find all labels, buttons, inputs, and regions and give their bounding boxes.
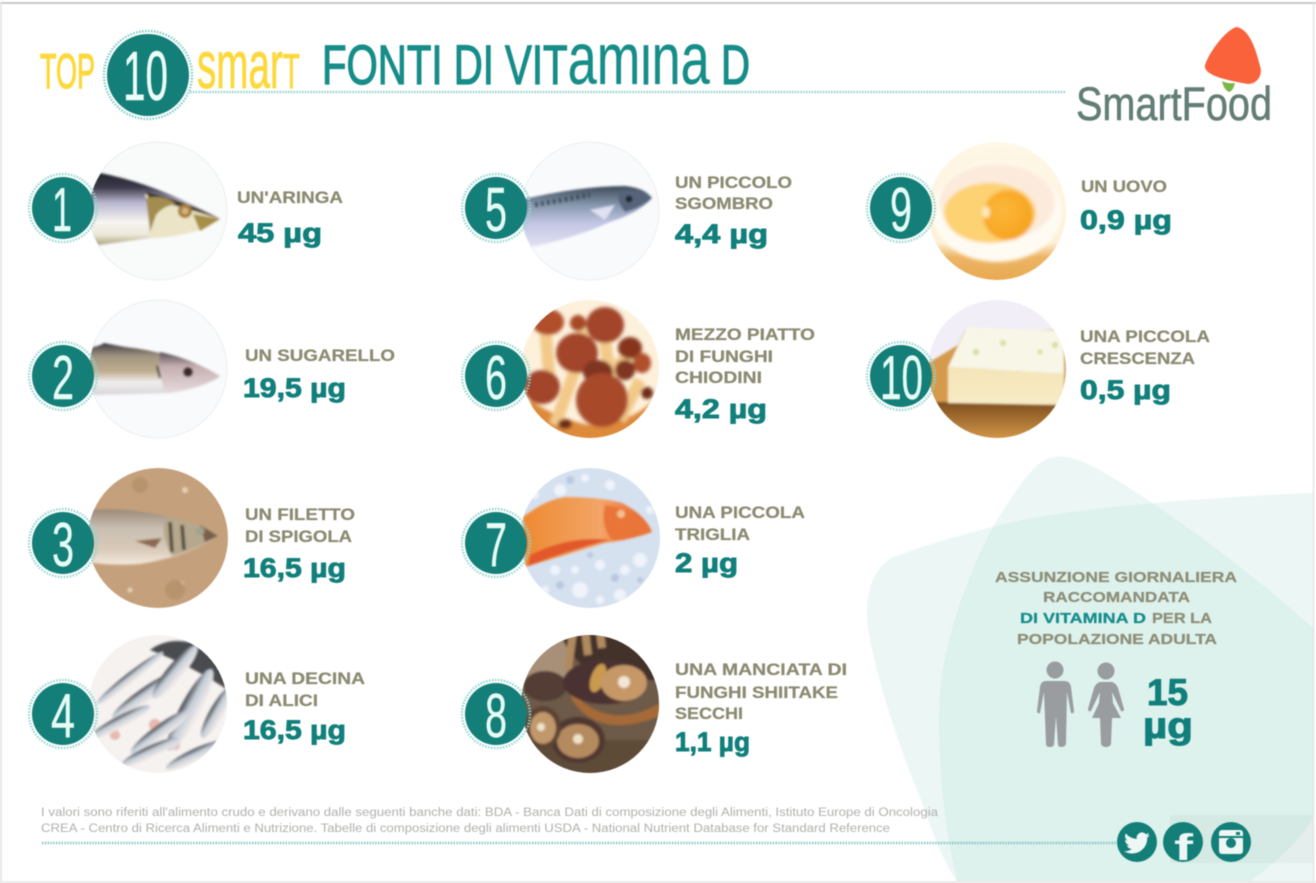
badge 5: 5 — [485, 176, 507, 245]
callout: recommended daily intake — [995, 569, 1237, 747]
photo: anchovies — [90, 635, 228, 773]
badge 3: 3 — [52, 511, 74, 580]
badge 2: 2 — [52, 344, 74, 413]
value: 1,1 µg — [675, 727, 750, 757]
badge 8: 8 — [485, 682, 507, 751]
social icons — [1117, 822, 1251, 868]
badge 7 — [462, 509, 530, 580]
callout text: POPOLAZIONE ADULTA — [1017, 631, 1217, 648]
photo: mackerel — [522, 184, 654, 248]
item 8: funghi shiitake: FUNGHI SHIITAKE — [675, 683, 838, 702]
photo: crescenza cheese — [928, 300, 1067, 439]
badge 1 — [29, 174, 97, 245]
item 7: triglia — [462, 464, 805, 612]
item 8: funghi shiitake — [462, 630, 847, 780]
callout text — [995, 569, 1237, 648]
background shapes: pale teal petals — [867, 456, 1313, 881]
value: 4,4 µg — [675, 219, 768, 249]
callout text: ASSUNZIONE GIORNALIERA — [995, 569, 1237, 586]
photo: horse mackerel — [90, 340, 221, 396]
logo: SmartFood — [1076, 27, 1272, 130]
title row — [40, 19, 750, 119]
badge 6: 6 — [485, 344, 507, 413]
label: UN UOVO — [1081, 177, 1167, 196]
value: 15 µg: 15 — [1147, 672, 1188, 713]
badge 10 — [867, 342, 935, 413]
item 9: uovo — [867, 139, 1172, 283]
item 3: spigola — [29, 464, 355, 612]
item 3: spigola: DI SPIGOLA — [245, 527, 352, 546]
photo: chiodini mushrooms — [522, 300, 660, 439]
footer sources note: CREA - Centro di Ricerca Alimenti e Nutrizione. Tabelle di composizione degli alimenti USDA - National Nutrient Database for Standard Reference — [41, 823, 890, 835]
icon: facebook: f — [1174, 827, 1194, 868]
photo: dried shiitake — [520, 634, 660, 774]
item 5: sgombro: SGOMBRO — [675, 194, 773, 213]
badge 5 — [462, 174, 530, 245]
title badge: 10: 10 — [123, 37, 168, 115]
photo: red mullet on ice — [521, 468, 660, 608]
item 7: triglia: TRIGLIA — [675, 525, 750, 544]
item 4: alici: DI ALICI — [245, 691, 318, 710]
badge 9 — [867, 174, 935, 245]
badge 6 — [462, 342, 530, 413]
label: UNA MANCIATA DI — [675, 660, 847, 679]
badge 7: 7 — [485, 511, 507, 580]
main title: FONTI DI VITamIna D — [322, 19, 750, 100]
value: 16,5 µg — [243, 553, 346, 583]
item 2: sugarello — [29, 297, 395, 441]
value: 0,9 µg — [1080, 205, 1172, 235]
badge 9: 9 — [890, 176, 912, 245]
icon: instagram — [1211, 822, 1251, 862]
footer sources note: I valori sono riferiti all'alimento crudo e derivano dalle seguenti banche dati: BDA - Banca Dati di composizione degli Alimenti, Istituto Europe di Oncologia — [41, 807, 939, 819]
value: 0,5 µg — [1080, 375, 1171, 405]
badge 3 — [29, 509, 97, 580]
badge 10: 10 — [880, 344, 923, 413]
value: 15 µg — [1143, 672, 1193, 746]
item 10: crescenza: CRESCENZA — [1080, 349, 1195, 368]
item 5: sgombro — [462, 139, 792, 283]
badge 2 — [29, 342, 97, 413]
item 6: funghi chiodini: CHIODINI — [675, 368, 762, 387]
footer sources note — [41, 807, 939, 835]
value: 15 µg: µg — [1143, 705, 1193, 746]
label: UNA PICCOLA — [1080, 327, 1210, 346]
callout text: RACCOMANDATA — [1043, 589, 1190, 606]
item 10: crescenza — [867, 295, 1210, 443]
logo mark — [1205, 27, 1261, 92]
logo wordmark: SmartFood — [1076, 77, 1272, 130]
badge 1: 1 — [52, 176, 72, 245]
label: UN SUGARELLO — [245, 346, 395, 365]
icon: twitter — [1117, 822, 1157, 862]
label: UN PICCOLO — [675, 173, 792, 192]
photo: herring — [90, 171, 222, 247]
item 4: alici — [29, 632, 365, 776]
value: 2 µg — [675, 548, 738, 578]
label: UN'ARINGA — [237, 188, 343, 207]
label: UNA PICCOLA — [675, 503, 805, 522]
badge 8 — [462, 680, 530, 751]
value: 19,5 µg — [243, 373, 346, 403]
value: 45 µg — [238, 218, 322, 248]
item 8: funghi shiitake: SECCHI — [675, 704, 743, 723]
callout text: PER LA — [1152, 610, 1212, 627]
label: UN FILETTO — [245, 505, 355, 524]
item 1: aringa — [29, 139, 343, 283]
title prefix: smart: smarT — [197, 28, 300, 103]
icon: man — [1037, 662, 1074, 747]
badge 4 — [29, 680, 97, 751]
photo: egg in bowl — [925, 139, 1069, 283]
label: MEZZO PIATTO — [675, 325, 815, 344]
title badge: 10 — [104, 31, 192, 119]
label: UNA DECINA — [245, 669, 365, 688]
title prefix: TOP: TOP — [40, 45, 95, 99]
photo: sea bass on sand — [84, 464, 232, 612]
callout text: DI VITAMINA D — [1020, 610, 1146, 627]
item 6: funghi chiodini: DI FUNGHI — [675, 347, 773, 366]
badge 4: 4 — [51, 682, 75, 751]
value: 4,2 µg — [675, 394, 767, 424]
icon: woman — [1088, 662, 1124, 747]
value: 16,5 µg — [243, 715, 346, 745]
item 6: funghi chiodini — [462, 295, 815, 445]
